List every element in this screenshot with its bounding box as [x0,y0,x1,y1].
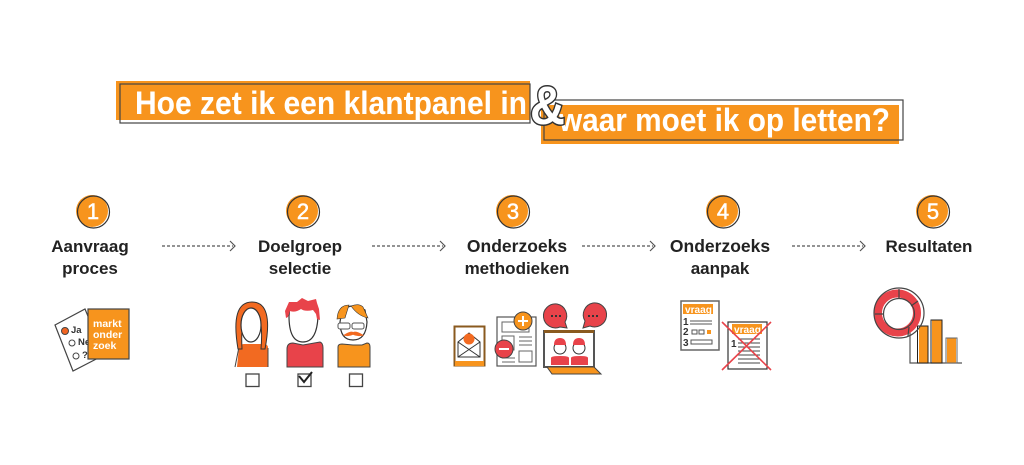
label 4: Onderzoeks [670,236,770,256]
number badge 5: 5 [927,199,939,224]
checkbox empty [246,374,259,386]
icon: document with plus and minus [495,312,536,366]
step 1 [51,195,129,371]
label 2: Doelgroep [258,237,342,256]
number badge 2 [286,195,320,228]
number badge 3 [496,195,530,228]
number badge 1 [76,195,110,228]
label 3: methodieken [465,259,569,278]
icon: older man with glasses and moustache [337,305,370,367]
number badge 3: 3 [507,199,519,224]
checkbox empty [350,374,362,386]
icon: crossed-out questionnaire [722,322,771,370]
arrow 3 to 4 [582,241,655,251]
icon: survey and market research card: zoek [93,340,117,352]
number badge 2: 2 [297,199,309,224]
step 4 [670,195,771,370]
icon: good questionnaire: 2 [683,327,689,338]
icon: good questionnaire: 1 [683,317,689,328]
label 1: proces [62,259,118,278]
title part one: Hoe zet ik een klantpanel in [135,85,527,121]
icon: man with red hair [285,298,323,367]
step 2 [235,195,370,386]
icon: survey and market research card: Ja [71,325,82,336]
icon: survey and market research card [55,309,129,371]
step 3 [454,195,607,374]
icon: survey and market research card: Ne [78,337,90,348]
label 4: aanpak [691,259,750,278]
icon: woman with orange hair [235,302,268,367]
icon: crossed-out questionnaire: vraag [734,324,761,336]
icon: good questionnaire: 3 [683,338,689,349]
title banner [116,76,903,144]
label 5: Resultaten [886,237,972,256]
number badge 5 [916,195,950,228]
arrow 1 to 2 [162,241,235,251]
icon: donut chart [874,288,924,338]
number badge 4: 4 [717,199,729,224]
label 2: selectie [269,259,331,278]
icon: survey and market research card: onder [93,329,122,341]
icon: bar chart [910,320,962,363]
label 3: Onderzoeks [467,236,567,256]
icon: survey and market research card: ? [82,350,88,361]
number badge 1: 1 [87,199,99,224]
icon: laptop video call [544,330,601,374]
icon: speech bubbles [543,303,607,328]
icon: good questionnaire: vraag [685,304,712,316]
icon: framed envelope [454,326,484,366]
checkbox checked [298,372,312,386]
title part two: waar moet ik op letten? [558,102,890,138]
arrow 4 to 5 [792,241,865,251]
ampersand: & [530,76,565,136]
arrow 2 to 3 [372,241,445,251]
label 1: Aanvraag [51,237,129,256]
icon: crossed-out questionnaire: 1 [731,339,737,350]
number badge 4 [706,195,740,228]
step 5 [874,195,972,363]
icon: survey and market research card: markt [93,318,122,330]
icon: good questionnaire [681,301,719,350]
